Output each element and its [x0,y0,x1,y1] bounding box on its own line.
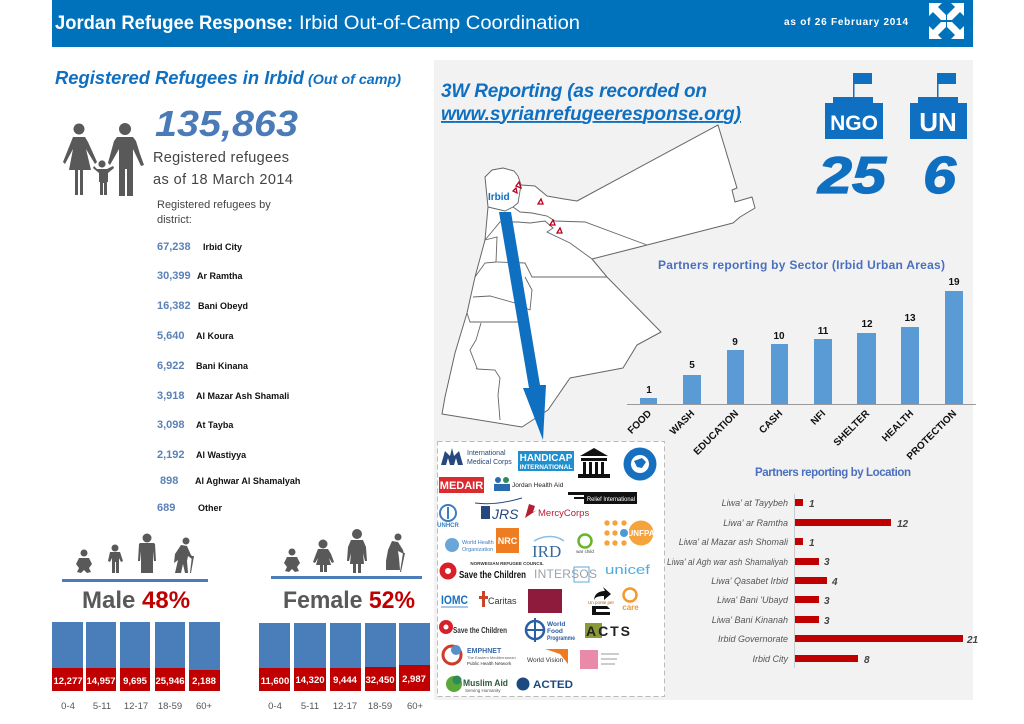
logo: NRC [470,528,544,566]
female age bars: 60+ [407,701,424,712]
logo: World Health Organization: Organization [462,547,493,553]
district list heading: Registered refugees by [157,199,271,211]
female age bars: 11,600 [261,676,289,687]
female age bars: 0-4 [268,701,282,712]
logo: Intersos: INTERSOS [534,567,597,581]
female divider [271,576,422,579]
male percentage: Male 48% [82,587,190,614]
title: Irbid Out-of-Camp Coordination [299,13,580,34]
heading: registered refugees: (Out of camp) [308,72,402,87]
district list: Al Mazar Ash Shamali [196,391,289,401]
icon: boy [108,544,123,573]
chart: partners by sector [626,258,976,462]
title [55,13,580,34]
header banner [52,0,973,47]
female age bars: 18-59 [368,701,392,712]
chart: partners by location: 8 [864,655,870,666]
logo: UNESCO [578,448,610,478]
male age bars: 12-17 [124,701,148,712]
map of Jordan [442,125,755,427]
female percentage: Female 52% [283,587,415,614]
chart: partners by location: 3 [824,616,830,627]
red location markers [513,182,562,233]
logo: UNICEF: unicef [605,562,650,577]
icon: UN building [910,73,967,139]
heading: 3W reporting [441,81,741,125]
district list: Irbid City [203,242,242,252]
logo: Mercy Corps: MercyCorps [538,508,589,519]
icon: female baby [284,548,300,572]
logo: Relief International: Relief International [587,496,635,503]
logo: black arrow: Un ponte per [588,600,615,605]
logo: EMPHNET [443,645,516,666]
female age bars: 5-11 [301,701,319,712]
chart: partners by sector: CASH [757,408,785,436]
district list: Ar Ramtha [197,271,244,281]
logo: ACTED: ACTED [533,679,573,691]
chart: partners by location: Liwa' Bani 'Ubayd [717,595,789,605]
logo: UNHCR: UNHCR [437,523,459,529]
chart: partners by sector: 5 [689,360,695,371]
logo: Relief International [568,492,637,504]
logo: Handicap International: HANDICAP [520,453,573,464]
male demographics [52,534,220,712]
logo: pink box [580,650,619,669]
chart: partners by location: 21 [966,635,979,646]
logo: Save the Children small: Save the Children [453,625,507,635]
logo: Muslim Aid: Serving Humanity [465,688,501,693]
map label: Irbid: Irbid [488,192,510,203]
district list: Other [198,503,223,513]
logo: UNHCR [437,505,459,529]
district list: 689 [157,502,175,514]
female age bars: 2,987 [402,674,426,685]
chart: partners by location: 4 [831,577,838,588]
logo: Handicap International: INTERNATIONAL [520,464,572,471]
icon: man [138,534,156,573]
district list: 30,399 [157,270,191,282]
district list: Bani Kinana [196,361,249,371]
district list: 6,922 [157,360,185,372]
logo: Handicap International [518,451,574,471]
registered refugees caption [153,150,293,188]
chart: partners by sector: NFI [809,408,828,428]
date: as of 26 February 2014 [784,17,908,28]
district list: 67,238 [157,241,191,253]
icon: coordination arrows [929,3,964,39]
logo: UNFPA: UNFPA [628,529,655,538]
district list: 3,098 [157,419,185,431]
district list: 3,918 [157,390,185,402]
female age bars: 14,320 [295,675,325,686]
logo: IRD: IRD [532,542,561,561]
chart title: Partners reporting by Sector (Irbid Urban Areas) [658,258,945,272]
chart: partners by location: Liwa' al Agh war ash Shamaliyah [667,557,788,567]
male divider [62,579,208,582]
district list heading [157,199,271,226]
icon: elderly man [174,538,194,573]
title: Jordan Refugee Response: [55,13,293,34]
logo: EMPHNET: EMPHNET [467,648,502,655]
male age bars: 12,277 [53,676,83,687]
logo: JRS [475,498,522,522]
logo: International Medical Corps: International [467,450,506,457]
logo: CARE: care [622,603,639,612]
icon: UN building: UN [919,107,957,137]
logo: ACTED [516,678,573,691]
chart: partners by location: 1 [809,499,815,510]
chart: partners by sector: 1 [646,385,652,396]
female age bars [259,623,430,712]
chart: partners by location [667,467,979,668]
logo: Medair: MEDAIR [440,480,483,492]
district list: Al Wastiyya [196,450,247,460]
male age bars: 5-11 [93,701,111,712]
UN count: 6 [923,147,957,205]
icon: NGO building: NGO [830,112,878,135]
chart: partners by location: 12 [897,519,909,530]
logo: EMPHNET: The Eastern Mediterranean [467,655,516,660]
heading: registered refugees: Registered Refugees in Irbid [55,67,305,88]
chart: partners by location: Liwa' ar Ramtha [723,518,788,528]
logo: green ring [576,534,594,554]
registered refugees caption: Registered refugees [153,150,289,166]
chart: partners by location: 3 [824,596,830,607]
NGO count: 25 [817,147,887,205]
chart: partners by location: 3 [824,557,830,568]
logo: International Medical Corps [441,448,512,466]
logo: UNFPA [604,520,655,546]
logo: CARE [622,588,639,612]
logo: EMPHNET: Public Health Network [467,661,512,666]
logo: NRC: NORWEGIAN REFUGEE COUNCIL [470,561,544,566]
chart: partners by sector: 9 [732,337,738,348]
logo: NRC: NRC [498,536,518,546]
logo: Caritas [479,591,517,607]
female age bars: 32,450 [365,675,395,686]
logo: Jordan Health Aid [494,477,564,491]
icon: NGO building [825,73,883,139]
logo: black arrow [588,587,615,615]
logo: Caritas: Caritas [488,596,517,606]
logo: World Vision [527,649,568,664]
chart: partners by location: Irbid City [752,654,788,664]
chart title: Partners reporting by Location [755,467,911,479]
icon: elderly woman [386,534,405,572]
total refugees number: 135,863 [155,103,298,144]
chart: partners by sector: 11 [818,326,829,337]
district list: 16,382 [157,300,191,312]
logo: maroon box [528,589,562,613]
panel: 3W reporting [434,60,973,700]
logo: Save the Children small [439,620,507,635]
district list: At Tayba [196,420,234,430]
district list: 5,640 [157,330,185,342]
logo: World Food Programme: Programme [547,635,575,642]
logo: World Vision: World Vision [527,657,564,664]
chart: partners by sector: PROTECTION [905,408,959,462]
female age bars: 9,444 [333,675,358,686]
chart: partners by sector: 13 [904,313,916,324]
male age bars: 2,188 [192,676,216,687]
heading: 3W reporting: 3W Reporting (as recorded on [441,81,707,102]
chart: partners by sector: SHELTER [832,408,873,449]
male age bars: 25,946 [155,676,185,687]
logo: International Medical Corps: Medical Corps [467,459,512,466]
logo: World Health Organization [445,538,494,553]
logo: Muslim Aid: Muslim Aid [463,678,508,688]
male age bars: 60+ [196,701,213,712]
logo: ACTS: ACTS [586,623,630,639]
chart: partners by location: Liwa' at Tayybeh [722,498,788,508]
icon: family [63,123,144,196]
female demographics [259,529,430,712]
logo: World Food Programme [526,618,575,642]
logo: Muslim Aid [446,676,508,693]
district list: 2,192 [157,449,185,461]
chart: partners by location: Liwa' Qasabet Irbid [711,576,789,586]
logo: World Health Organization: World Health [462,540,494,546]
chart: partners by location: Liwa' al Mazar ash Shomali [679,537,789,547]
chart: partners by location: Liwa' Bani Kinanah [712,615,788,625]
female age bars: 12-17 [333,701,357,712]
registered refugees caption: as of 18 March 2014 [153,172,293,188]
chart: partners by sector: EDUCATION [692,408,741,458]
chart: partners by location: 1 [809,538,815,549]
chart: partners by sector: 10 [773,331,785,342]
heading: 3W reporting: www.syrianrefugeeresponse.org) [441,104,741,125]
logo: Save the Children: Save the Children [459,570,526,581]
logo: World Food Programme: World [547,621,565,628]
male age bars: 9,695 [123,676,148,687]
arrow: from Irbid to partner logos [499,212,546,440]
logo: World Food Programme: Food [547,628,563,635]
district list heading: district: [157,214,192,226]
chart: partners by sector: FOOD [626,408,654,437]
logo: JRS: JRS [491,506,519,522]
male age bars: 18-59 [158,701,182,712]
icon: girl [313,540,334,572]
logo: Mercy Corps [525,504,589,519]
district list: Al Aghwar Al Shamalyah [195,476,300,486]
district list: Bani Obeyd [198,301,248,311]
male age bars [52,622,220,712]
logo: green ring: war child [576,549,594,554]
chart: partners by location: Irbid Governorate [718,634,788,644]
logo: Jordan Health Aid: Jordan Health Aid [512,482,564,489]
district list: Al Koura [196,331,234,341]
icon: woman [347,529,367,573]
logo: blue circle seal [624,448,656,480]
icon: male baby [76,550,92,573]
chart: partners by sector: WASH [668,408,697,437]
male age bars: 14,957 [86,676,116,687]
district list [157,241,300,514]
logo: Save the Children [440,562,526,581]
male age bars: 0-4 [61,701,75,712]
district list: 898 [160,475,178,487]
chart: partners by sector: 12 [861,319,873,330]
chart: partners by sector: HEALTH [880,408,916,444]
logo: IOMC: IOMC [441,593,468,607]
chart: partners by sector: 19 [948,277,960,288]
panel: partner logos [437,442,664,696]
